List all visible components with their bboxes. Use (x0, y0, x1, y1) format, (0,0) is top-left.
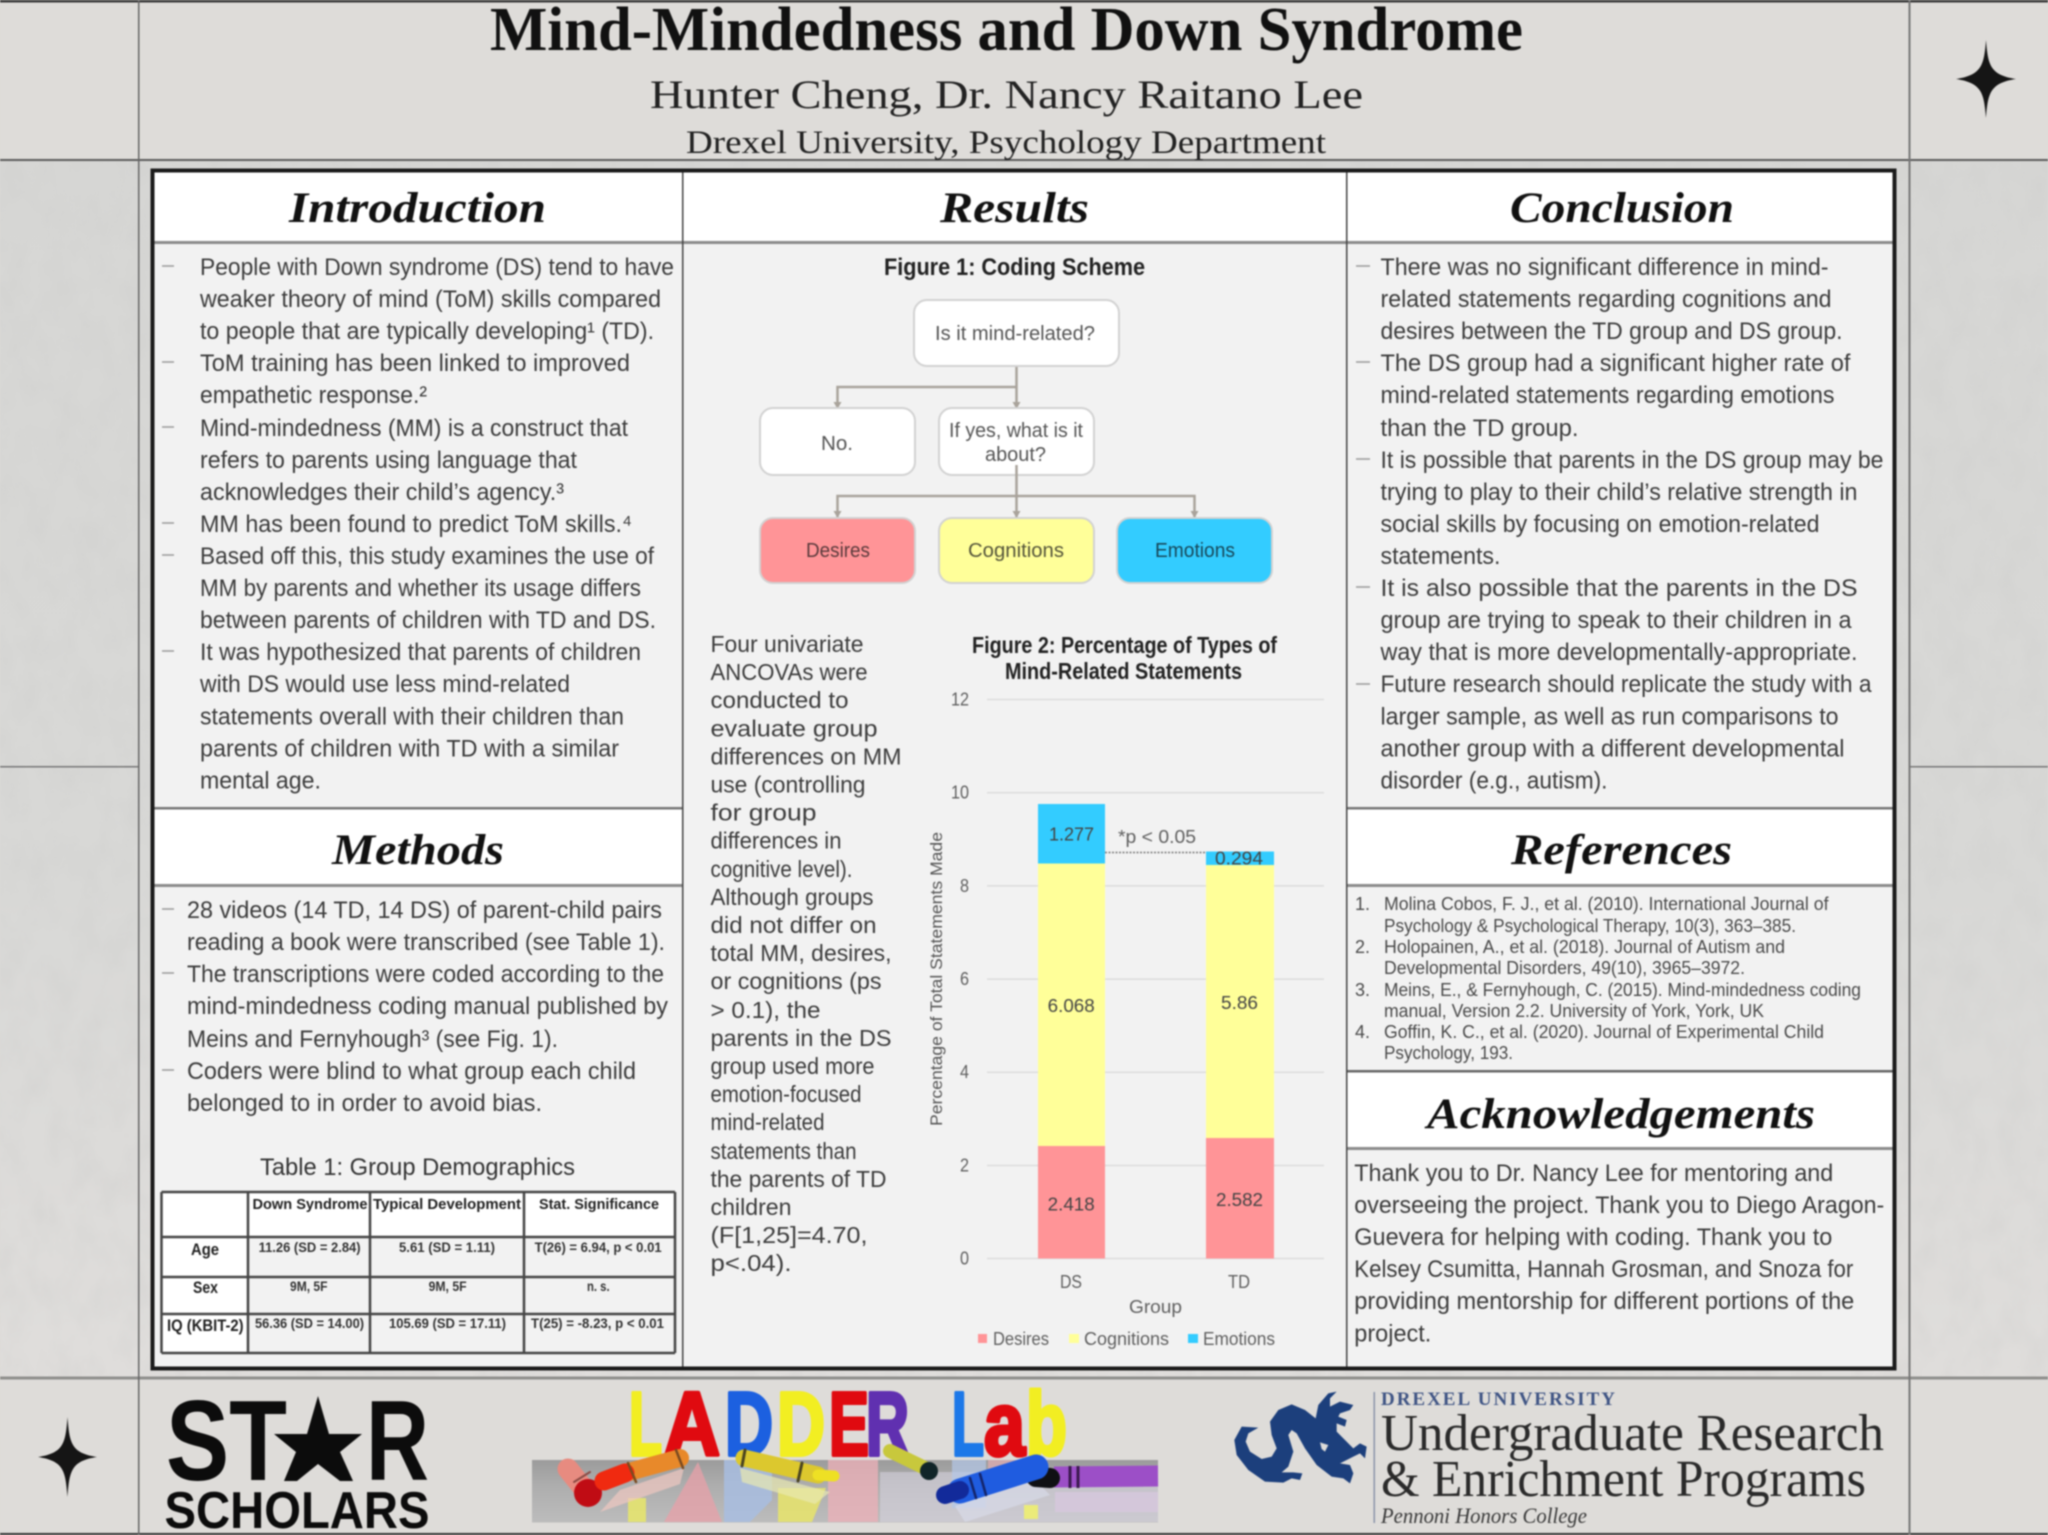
results paragraph: differences on MM (710, 744, 902, 770)
logo: STAR Scholars: ST (166, 1378, 287, 1505)
box: cognitions: Cognitions (968, 540, 1064, 562)
conclusion bullets: The DS group had a significant higher rate of (1380, 350, 1851, 377)
figure 1: coding scheme flowchart (760, 254, 1272, 583)
y axis ticks: 10 (951, 783, 969, 803)
figure 2 title (972, 632, 1277, 684)
conclusion bullets: than the TD group. (1380, 415, 1578, 442)
figure 1 title: Figure 1: Coding Scheme (884, 254, 1145, 281)
reference list: 4. (1355, 1022, 1370, 1042)
reference list: Holopainen, A., et al. (2018). Journal of Autism and (1384, 937, 1785, 957)
reference list: Psychology, 193. (1384, 1043, 1513, 1063)
introduction bullets: acknowledges their child’s agency.³ (200, 479, 564, 506)
panel: results (710, 185, 1324, 1349)
table 1: group demographics: IQ (KBIT-2) (167, 1316, 244, 1335)
conclusion bullets: trying to play to their child’s relative strength in (1380, 479, 1858, 506)
results paragraph: emotion-focused (710, 1081, 862, 1107)
box: emotions (1117, 518, 1272, 583)
introduction bullets: weaker theory of mind (ToM) skills compared (199, 286, 661, 313)
results paragraph: conducted to (710, 687, 848, 713)
introduction bullets: Mind-mindedness (MM) is a construct that (200, 415, 628, 442)
table 1: group demographics: 5.61 (SD = 1.11) (399, 1239, 495, 1255)
introduction bullets: refers to parents using language that (200, 447, 577, 474)
lab name letters: b (1026, 1375, 1067, 1475)
introduction bullets: parents of children with TD with a similar (200, 736, 619, 762)
introduction bullets: ToM training has been linked to improved (200, 350, 630, 377)
results paragraph: for group (710, 800, 816, 826)
logo: LADDER Lab with crayons (532, 1375, 1158, 1522)
reference list: 2. (1355, 937, 1370, 957)
results paragraph: use (controlling (710, 772, 866, 798)
logo: Drexel Undergraduate Research & Enrichment Programs: Undergraduate Research (1381, 1405, 1884, 1462)
y axis ticks (951, 690, 969, 1268)
results paragraph: cognitive level). (710, 856, 852, 882)
conclusion bullets: It is possible that parents in the DS group may be (1380, 447, 1884, 474)
icon: star forming the letter A (274, 1396, 362, 1481)
methods bullets (162, 897, 668, 1117)
reference list: 3. (1355, 980, 1370, 1000)
crayon: yellow (742, 1450, 834, 1481)
box: if yes: If yes, what is it (949, 420, 1083, 442)
conclusion bullets: statements. (1380, 543, 1500, 570)
reference list: Meins, E., & Fernyhough, C. (2015). Mind-mindedness coding (1384, 980, 1861, 1000)
results paragraph: evaluate group (710, 716, 878, 742)
acknowledgements text: Guevera for helping with coding. Thank you to (1354, 1224, 1832, 1251)
conclusion bullets: desires between the TD group and DS group. (1380, 318, 1842, 345)
logo: Drexel Undergraduate Research & Enrichment Programs: Pennoni Honors College (1380, 1503, 1587, 1528)
table 1: group demographics: Stat. Significance (539, 1196, 659, 1213)
conclusion bullets: social skills by focusing on emotion-related (1380, 511, 1820, 538)
results paragraph: p<.04). (710, 1250, 792, 1276)
box: cognitions (939, 518, 1094, 583)
lab name letters: D (725, 1375, 773, 1475)
logo: Drexel Undergraduate Research & Enrichment Programs: DREXEL UNIVERSITY (1381, 1389, 1615, 1410)
introduction bullets: statements overall with their children than (200, 704, 624, 730)
y axis ticks: 0 (960, 1248, 969, 1268)
bar: DS: 2.418 (1048, 1194, 1095, 1214)
results paragraph: Four univariate (710, 631, 864, 657)
acknowledgements text (1354, 1160, 1884, 1348)
results paragraph (710, 631, 902, 1276)
panel: references (1355, 827, 1861, 1063)
logo: Drexel Undergraduate Research & Enrichment Programs (1234, 1389, 1884, 1528)
results paragraph: differences in (710, 828, 842, 854)
icon: four-point star top right (1956, 40, 2016, 118)
introduction bullets: with DS would use less mind-related (199, 671, 570, 698)
crayon: pink (568, 1469, 602, 1507)
figure 2 title: Mind-Related Statements (1005, 658, 1242, 684)
crayon: orange (604, 1450, 683, 1482)
methods bullets: reading a book were transcribed (see Table 1). (187, 929, 665, 956)
authors: Hunter Cheng, Dr. Nancy Raitano Lee (650, 72, 1363, 117)
conclusion bullets: related statements regarding cognitions and (1380, 286, 1832, 313)
figure 2: stacked bar chart (927, 632, 1324, 1349)
bar: DS (1038, 804, 1105, 1258)
conclusion bullets: way that is more developmentally-appropriate. (1380, 639, 1858, 666)
lab name letters: R (866, 1375, 909, 1475)
table 1: group demographics: 9M, 5F (290, 1278, 328, 1294)
table 1: group demographics: 105.69 (SD = 17.11) (389, 1315, 506, 1331)
bar: TD: 2.582 (1216, 1190, 1263, 1210)
table 1: group demographics: 9M, 5F (429, 1278, 467, 1294)
bar: TD: 0.294 (1215, 848, 1263, 868)
heading: references: References (1510, 827, 1732, 874)
conclusion bullets: group are trying to speak to their children in a (1380, 607, 1852, 634)
reflective table surface (532, 1460, 1158, 1522)
panel: acknowledgements (1354, 1091, 1884, 1348)
results paragraph: or cognitions (ps (710, 968, 882, 994)
panel: conclusion (1356, 185, 1884, 794)
lab name letters: D (777, 1375, 825, 1475)
introduction bullets (162, 254, 674, 794)
box: no: No. (821, 433, 853, 455)
results paragraph: Although groups (710, 884, 874, 910)
reference list: manual, Version 2.2. University of York, York, UK (1384, 1001, 1764, 1021)
results paragraph: the parents of TD (710, 1166, 886, 1192)
methods bullets: belonged to in order to avoid bias. (187, 1090, 542, 1117)
heading: results: Results (939, 185, 1089, 232)
introduction bullets: It was hypothesized that parents of children (200, 639, 641, 666)
introduction bullets: empathetic response.² (200, 382, 427, 409)
y axis ticks: 6 (960, 969, 969, 989)
lab name letters: A (664, 1375, 720, 1475)
lab name letters (629, 1375, 1067, 1475)
heading: methods: Methods (331, 827, 504, 874)
logo: STAR Scholars (164, 1378, 430, 1535)
introduction bullets: Based off this, this study examines the use of (200, 543, 654, 570)
introduction bullets: People with Down syndrome (DS) tend to have (200, 254, 674, 281)
box: emotions: Emotions (1155, 540, 1235, 562)
box: no (760, 408, 915, 475)
x axis labels (1060, 1272, 1250, 1317)
introduction bullets: MM has been found to predict ToM skills.⁴ (200, 511, 632, 538)
results paragraph: mind-related (710, 1109, 824, 1135)
conclusion bullets: mind-related statements regarding emotions (1380, 382, 1834, 409)
reference list: Molina Cobos, F. J., et al. (2010). International Journal of (1384, 894, 1829, 914)
conclusion bullets: Future research should replicate the study with a (1380, 671, 1872, 698)
legend: Desires (993, 1329, 1049, 1349)
reference list: Developmental Disorders, 49(10), 3965–3972. (1384, 958, 1745, 978)
bar: TD: 5.86 (1221, 993, 1258, 1013)
acknowledgements text: project. (1354, 1320, 1431, 1348)
table 1: group demographics: Down Syndrome (252, 1196, 368, 1213)
reference list: Goffin, K. C., et al. (2020). Journal of Experimental Child (1384, 1022, 1824, 1042)
results paragraph: did not differ on (710, 912, 876, 938)
table 1: group demographics: Typical Development (373, 1196, 521, 1213)
acknowledgements text: overseeing the project. Thank you to Diego Aragon- (1354, 1192, 1884, 1219)
box: desires: Desires (806, 540, 870, 562)
introduction bullets: to people that are typically developing¹ (TD). (200, 318, 654, 345)
conclusion bullets (1356, 254, 1884, 794)
legend (978, 1329, 1275, 1349)
logo: Drexel Undergraduate Research & Enrichment Programs: & Enrichment Programs (1381, 1451, 1866, 1508)
introduction bullets: MM by parents and whether its usage differs (200, 575, 641, 602)
lab name letters: L (629, 1375, 662, 1475)
title block (490, 0, 1523, 161)
reference list: 1. (1355, 894, 1370, 914)
results paragraph: children (710, 1194, 792, 1220)
methods bullets: Meins and Fernyhough³ (see Fig. 1). (187, 1026, 558, 1053)
methods bullets: 28 videos (14 TD, 14 DS) of parent-child pairs (187, 897, 662, 924)
table title: Table 1: Group Demographics (260, 1154, 575, 1181)
heading: introduction: Introduction (288, 185, 546, 232)
y axis ticks: 12 (951, 690, 969, 710)
panel: methods (161, 827, 675, 1353)
y axis ticks: 4 (960, 1062, 969, 1082)
results paragraph: group used more (710, 1053, 874, 1079)
x axis labels: Group (1129, 1297, 1182, 1317)
icon: crayons (568, 1450, 1158, 1507)
acknowledgements text: providing mentorship for different portions of the (1354, 1288, 1854, 1315)
table 1: group demographics: n. s. (587, 1278, 610, 1294)
logo: STAR Scholars: R (366, 1378, 429, 1505)
results paragraph: > 0.1), the (710, 997, 820, 1023)
x axis labels: DS (1060, 1272, 1082, 1292)
affiliation: Drexel University, Psychology Department (686, 125, 1326, 161)
results paragraph: total MM, desires, (710, 940, 892, 966)
introduction bullets: between parents of children with TD and DS. (200, 607, 656, 634)
reference list (1355, 894, 1861, 1063)
icon: four-point star bottom left (38, 1417, 97, 1497)
results paragraph: parents in the DS (710, 1025, 892, 1051)
panel: introduction (162, 185, 674, 794)
table 1: group demographics: Sex (193, 1278, 218, 1297)
lab name letters: E (829, 1375, 869, 1475)
box: if yes (939, 408, 1094, 475)
conclusion bullets: larger sample, as well as run comparisons to (1380, 704, 1838, 730)
crayon: small yellow-green (890, 1451, 938, 1480)
results paragraph: statements than (710, 1138, 856, 1164)
figure 2 title: Figure 2: Percentage of Types of (972, 632, 1277, 658)
results paragraph: (F[1,25]=4.70, (710, 1222, 868, 1248)
methods bullets: Coders were blind to what group each child (187, 1058, 636, 1085)
box: is it mind-related (914, 300, 1119, 366)
results paragraph: ANCOVAs were (710, 659, 868, 685)
introduction bullets: mental age. (200, 768, 321, 794)
reference list: Psychology & Psychological Therapy, 10(3), 363–385. (1384, 916, 1796, 936)
heading: acknowledgements: Acknowledgements (1424, 1091, 1815, 1138)
significance annotation (1105, 827, 1206, 852)
lab name letters: L (952, 1375, 984, 1475)
main poster frame (152, 170, 1894, 1368)
crayon: purple (1054, 1466, 1158, 1488)
legend: Emotions (1203, 1329, 1275, 1349)
icon: Drexel dragon (1234, 1392, 1367, 1483)
table 1: group demographics: Age (191, 1240, 219, 1259)
table 1: group demographics: 56.36 (SD = 14.00) (255, 1315, 364, 1331)
methods bullets: The transcriptions were coded according to the (187, 961, 664, 988)
bar: DS: 1.277 (1049, 824, 1094, 844)
y axis label: Percentage of Total Statements Made (927, 832, 946, 1126)
y axis ticks: 2 (960, 1156, 969, 1176)
box: desires (760, 518, 915, 583)
table 1: group demographics: T(26) = 6.94, p < 0.01 (535, 1239, 662, 1255)
lab name letters: a (984, 1375, 1026, 1475)
acknowledgements text: Thank you to Dr. Nancy Lee for mentoring and (1354, 1160, 1833, 1187)
conclusion bullets: There was no significant difference in mind- (1380, 254, 1828, 281)
table 1: group demographics: 11.26 (SD = 2.84) (259, 1239, 361, 1255)
significance annotation: *p < 0.05 (1118, 827, 1196, 847)
conclusion bullets: It is also possible that the parents in the DS (1380, 575, 1858, 602)
heading: conclusion: Conclusion (1510, 185, 1734, 232)
conclusion bullets: disorder (e.g., autism). (1380, 768, 1608, 794)
box: if yes: about? (985, 444, 1046, 466)
table 1: group demographics (161, 1154, 675, 1353)
x axis labels: TD (1228, 1272, 1250, 1292)
bar: DS: 6.068 (1048, 996, 1095, 1016)
conclusion bullets: another group with a different developmental (1380, 736, 1844, 762)
table 1: group demographics: T(25) = -8.23, p < 0.01 (531, 1315, 664, 1331)
legend: Cognitions (1084, 1329, 1169, 1349)
crayon: blue (945, 1467, 1050, 1498)
box: is it mind-related: Is it mind-related? (935, 323, 1095, 345)
acknowledgements text: Kelsey Csumitta, Hannah Grosman, and Snoza for (1354, 1256, 1853, 1283)
bar: TD (1206, 848, 1274, 1258)
methods bullets: mind-mindedness coding manual published by (187, 993, 668, 1020)
y axis ticks: 8 (960, 876, 969, 896)
